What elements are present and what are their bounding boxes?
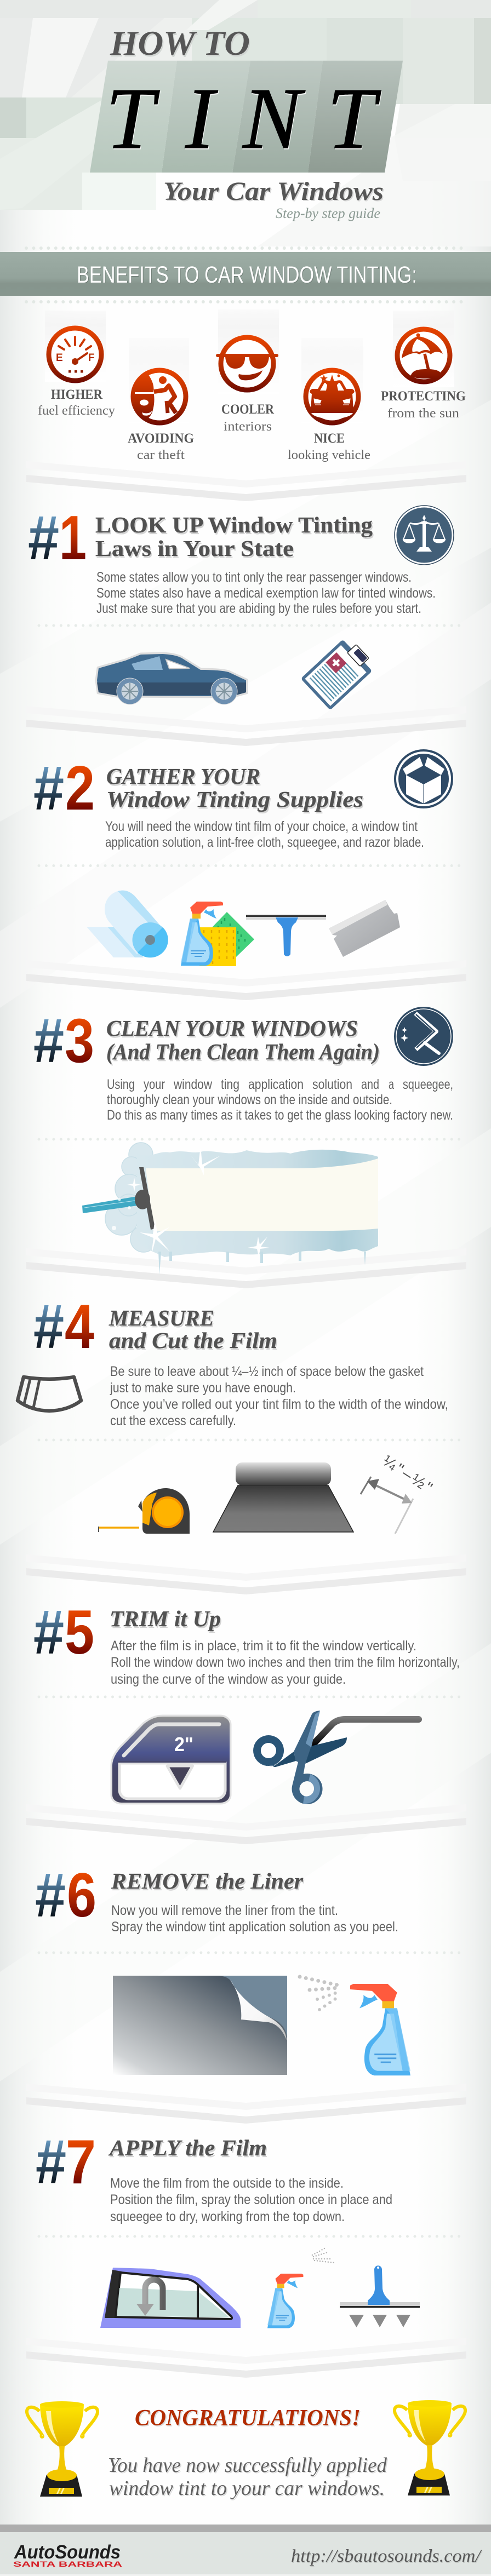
step 2 heading: Window Tinting Supplies xyxy=(106,787,363,812)
illustration: window lowered two inches xyxy=(112,1717,230,1803)
number 4: # xyxy=(33,1292,64,1362)
number 7 xyxy=(36,2127,96,2197)
step 3 text: window xyxy=(173,1077,213,1092)
step 3 text: and xyxy=(361,1077,379,1092)
label: avoiding: AVOIDING xyxy=(128,431,194,446)
illustration: cloths xyxy=(199,912,254,966)
title: HOW TO: HOW TO xyxy=(110,24,250,62)
step 1 heading: Laws in Your State xyxy=(95,536,294,561)
step 5 text: using the curve of the window as your guide. xyxy=(111,1672,346,1687)
number 2: # xyxy=(33,754,64,823)
illustration: squeegee with down arrows xyxy=(340,2265,420,2327)
illustration: window lowered two inches: 2" xyxy=(174,1733,193,1755)
step 4 text: Be sure to leave about ¼–½ inch of space below the gasket xyxy=(110,1364,424,1379)
illustration: tape measure xyxy=(99,1488,190,1534)
step 7 text: squeegee to dry, working from the top down. xyxy=(110,2209,345,2224)
subtitle: Your Car Windows: Your Car Windows xyxy=(163,177,384,206)
label: cooler: COOLER xyxy=(221,402,275,417)
illustration: spray bottle xyxy=(181,902,223,966)
illustration: film roll xyxy=(87,891,168,957)
illustration: razor blade xyxy=(329,900,400,957)
congratulations message xyxy=(108,2454,387,2500)
icon: fuel gauge xyxy=(49,328,101,381)
congratulations panel xyxy=(27,2400,465,2500)
step 7 panel xyxy=(36,2127,460,2328)
illustration: car door window with arrow xyxy=(100,2268,241,2328)
tagline: step-by step guide: Step-by step guide xyxy=(276,205,380,221)
number 1: 1 xyxy=(59,503,87,573)
step 3 text: your xyxy=(144,1077,165,1092)
icon: sunglasses face xyxy=(218,337,277,390)
number 6: # xyxy=(35,1861,66,1930)
number 1 xyxy=(28,503,87,573)
step 4 text: Once you’ve rolled out your tint film to the width of the window, xyxy=(110,1397,448,1412)
step 3 panel xyxy=(33,1006,460,1275)
number 3: # xyxy=(33,1006,64,1076)
icon: beach umbrella xyxy=(397,329,450,382)
label: higher: HIGHER xyxy=(51,387,103,402)
step 3 text: ting xyxy=(221,1077,239,1092)
illustration: squeegee xyxy=(246,915,326,956)
step 2 heading xyxy=(106,764,363,812)
step 7 text: Move the film from the outside to the inside. xyxy=(110,2176,344,2191)
step 3 heading xyxy=(106,1016,380,1064)
step 3 text: solution xyxy=(312,1077,352,1092)
step 1 panel xyxy=(28,503,460,710)
illustration: spray bottle xyxy=(267,2274,303,2328)
footer xyxy=(0,2525,491,2576)
step 3 text: squeegee, xyxy=(403,1077,453,1092)
step 3 heading: (And Then Clean Them Again) xyxy=(106,1039,380,1064)
number 3: 3 xyxy=(65,1006,94,1076)
logo: AutoSounds Santa Barbara: SANTA BARBARA xyxy=(13,2560,122,2568)
step 4 heading xyxy=(109,1305,277,1353)
step 4 text xyxy=(110,1364,448,1428)
logo: AutoSounds Santa Barbara: AutoSounds xyxy=(14,2541,121,2563)
number 5 xyxy=(33,1598,94,1667)
illustration: medical clipboard xyxy=(301,635,377,710)
step 2 text: You will need the window tint film of your choice, a window tint xyxy=(105,819,418,834)
step 6 panel xyxy=(35,1861,460,2075)
benefits banner: BENEFITS TO CAR WINDOW TINTING: xyxy=(77,262,417,288)
step 4 text: cut the excess carefully. xyxy=(110,1413,236,1428)
label: looking vehicle: looking vehicle xyxy=(288,448,370,462)
icon: car thief xyxy=(132,370,186,423)
illustration: spray bottle xyxy=(350,1984,410,2075)
illustration: spray mist xyxy=(300,1977,340,2010)
step 3 text: application xyxy=(248,1077,304,1092)
benefit: cooler interiors xyxy=(218,337,277,434)
number 6 xyxy=(35,1861,96,1930)
benefit: higher fuel efficiency xyxy=(38,328,115,418)
icon: squeegee in circle xyxy=(394,1007,453,1066)
illustration: blue car xyxy=(97,654,246,704)
step 3 text xyxy=(107,1077,453,1123)
step 3 text: a xyxy=(389,1077,394,1092)
step 2 heading: GATHER YOUR xyxy=(106,764,260,789)
benefit: avoiding car theft xyxy=(128,370,194,462)
step 2 panel xyxy=(33,750,460,966)
number 2: 2 xyxy=(65,754,95,823)
step 7 text xyxy=(110,2176,392,2224)
step 4 heading: and Cut the Film xyxy=(109,1328,277,1353)
step 4 panel xyxy=(18,1292,460,1534)
icon: right trophy xyxy=(395,2400,465,2495)
illustration: film roll xyxy=(213,1462,353,1532)
label: from the sun: from the sun xyxy=(387,406,459,421)
label: interiors: interiors xyxy=(224,420,272,434)
step 5 text xyxy=(111,1638,460,1687)
icon shadows xyxy=(45,309,454,423)
step 1 text xyxy=(96,570,436,616)
icon: scales of justice xyxy=(395,506,454,565)
header geometric background xyxy=(0,0,491,246)
website url: http://sbautosounds.com/ xyxy=(291,2546,482,2566)
number 6: 6 xyxy=(67,1861,96,1930)
step 1 text: Some states allow you to tint only the rear passenger windows. xyxy=(96,570,412,585)
step 3 text: Using xyxy=(107,1077,135,1092)
step 3 text: thoroughly clean your windows on the inside and outside. xyxy=(107,1092,392,1108)
step 6 text: Now you will remove the liner from the tint. xyxy=(111,1903,338,1918)
step 1 text: Just make sure that you are abiding by the rules before you start. xyxy=(96,601,421,616)
illustration: peeling film xyxy=(113,1976,287,2075)
step 2 text: application solution, a lint-free cloth, squeegee, and razor blade. xyxy=(105,835,424,850)
step 7 text: Position the film, spray the solution once in place and xyxy=(110,2192,392,2207)
step 6 text: Spray the window tint application solution as you peel. xyxy=(111,1919,398,1935)
title panel with TINT: TINT xyxy=(106,70,381,167)
benefits banner xyxy=(0,248,491,302)
illustration: measurement gap label: ¼"–½" xyxy=(379,1452,435,1497)
number 4: 4 xyxy=(65,1292,94,1362)
number 5: # xyxy=(33,1598,64,1667)
congratulations message: You have now successfully applied xyxy=(108,2454,387,2477)
step 6 heading: REMOVE the Liner xyxy=(111,1868,304,1894)
step 1 heading: LOOK UP Window Tinting xyxy=(95,512,373,537)
number 5: 5 xyxy=(65,1598,94,1667)
number 4 xyxy=(33,1292,94,1362)
label: fuel efficiency: fuel efficiency xyxy=(38,404,115,418)
number 3 xyxy=(33,1006,94,1076)
icon: left trophy xyxy=(27,2401,98,2497)
icon: fuel gauge: F xyxy=(88,352,95,364)
benefit: protecting from the sun xyxy=(381,329,466,421)
congratulations heading: CONGRATULATIONS! xyxy=(135,2406,361,2431)
icon: open box xyxy=(395,750,452,807)
number 7: 7 xyxy=(66,2127,96,2197)
icon: fuel gauge: E xyxy=(56,352,63,364)
illustration: soapy window and squeegee xyxy=(82,1143,378,1275)
number 7: # xyxy=(36,2127,66,2197)
step 5 text: After the film is in place, trim it to fit the window vertically. xyxy=(111,1638,416,1654)
icon: shiny car front xyxy=(306,370,358,423)
congratulations message: window tint to your car windows. xyxy=(109,2477,385,2500)
section divider chevrons xyxy=(26,461,466,2378)
benefit: nice looking vehicle xyxy=(288,370,370,462)
illustration: measurement gap label xyxy=(361,1452,435,1534)
step 5 panel xyxy=(33,1598,460,1804)
step 6 text xyxy=(111,1903,398,1935)
illustration: spray mist xyxy=(312,2248,334,2263)
number 2 xyxy=(33,754,95,823)
step 5 heading: TRIM it Up xyxy=(110,1606,221,1631)
illustration: scissors cutting xyxy=(253,1711,419,1804)
step 2 text xyxy=(105,819,424,850)
label: car theft: car theft xyxy=(137,448,185,462)
label: protecting: PROTECTING xyxy=(381,389,466,404)
number 1: # xyxy=(28,503,59,573)
step 3 heading: CLEAN YOUR WINDOWS xyxy=(106,1016,358,1041)
step 4 text: just to make sure you have enough. xyxy=(110,1380,296,1396)
icon: window outline xyxy=(18,1377,81,1411)
label: nice: NICE xyxy=(314,431,345,446)
step 1 heading xyxy=(95,512,373,561)
step 7 heading: APPLY the Film xyxy=(108,2135,267,2160)
step 4 heading: MEASURE xyxy=(109,1305,214,1330)
